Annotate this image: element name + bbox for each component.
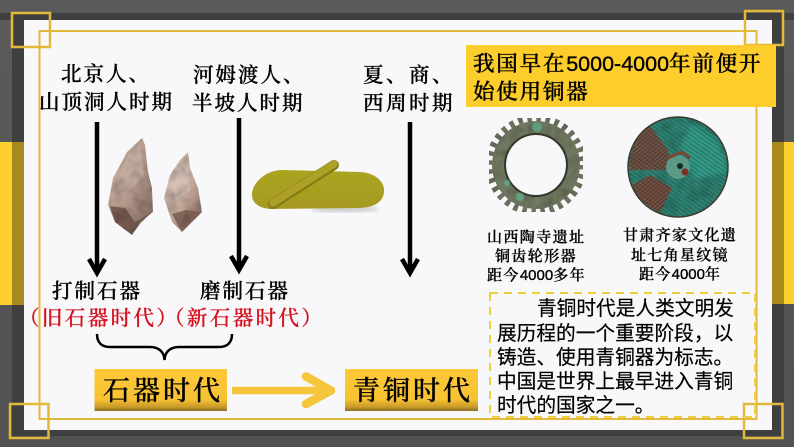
label: Neolithic Age: （新石器时代） xyxy=(164,307,324,330)
box: Stone Age xyxy=(94,369,227,411)
arrow: bronze age xyxy=(402,122,418,273)
heading callout: 始使用铜器 xyxy=(473,80,590,104)
caption: gear artifact xyxy=(487,228,586,284)
image: polished millstone xyxy=(252,164,384,212)
label: Hemudu period: 半坡人时期 xyxy=(192,92,304,115)
corner: top left xyxy=(12,13,50,47)
label: Peking man period: 北京人、 xyxy=(61,63,151,86)
image: chipped stone tools xyxy=(108,138,202,235)
label: Xia Shang Western Zhou period xyxy=(363,64,455,115)
label: chipped stone tools: 打制石器 xyxy=(52,280,142,303)
dashed text box: 时代的国家之一。 xyxy=(497,395,654,417)
left yellow band xyxy=(0,142,24,305)
arrow: chipped stone xyxy=(89,122,105,273)
dashed text box xyxy=(490,293,755,417)
dashed text box: 展历程的一个重要阶段，以 xyxy=(497,323,733,345)
arrow: Stone Age to Bronze Age xyxy=(232,376,331,404)
arrow: polished stone xyxy=(231,118,247,270)
label: Paleolithic Age: （旧石器时代） xyxy=(19,307,179,330)
caption: star mirror: 址七角星纹镜 xyxy=(631,246,729,264)
caption: gear artifact: 山西陶寺遗址 xyxy=(487,228,585,246)
caption: star mirror: 甘肃齐家文化遗 xyxy=(623,226,737,244)
corner: bottom left xyxy=(10,404,48,438)
label: Hemudu period: 河姆渡人、 xyxy=(193,64,306,87)
dashed text box: 青铜时代是人类文明发 xyxy=(537,298,734,320)
heading callout: 我国早在5000-4000年前便开 xyxy=(473,52,762,76)
corner: bottom right xyxy=(744,404,782,438)
caption: gear artifact: 距今4000多年 xyxy=(487,266,586,284)
corner: top right xyxy=(745,11,783,45)
box: Bronze Age xyxy=(345,369,478,411)
inner gold frame xyxy=(40,31,756,419)
image: bronze gear artifact xyxy=(489,118,583,212)
right yellow band xyxy=(772,142,794,304)
box: Stone Age: 石器时代 xyxy=(103,376,223,406)
label: Hemudu period xyxy=(192,64,306,115)
heading callout xyxy=(466,45,776,107)
caption: star mirror xyxy=(623,226,737,283)
dashed text box: 铸造、使用青铜器为标志。 xyxy=(497,347,733,369)
label: polished stone tools: 磨制石器 xyxy=(200,280,290,303)
brace xyxy=(97,334,232,360)
dashed text box: 中国是世界上最早进入青铜 xyxy=(497,371,733,393)
label: Xia Shang Western Zhou period: 西周时期 xyxy=(363,92,455,115)
caption: gear artifact: 铜齿轮形器 xyxy=(495,247,577,265)
label: Xia Shang Western Zhou period: 夏、商、 xyxy=(363,64,455,87)
caption: star mirror: 距今4000年 xyxy=(639,265,721,283)
image: bronze seven-pointed star mirror xyxy=(628,117,728,217)
label: Peking man period: 山顶洞人时期 xyxy=(39,91,174,114)
box: Bronze Age: 青铜时代 xyxy=(353,376,473,406)
label: Peking man period xyxy=(39,63,174,114)
